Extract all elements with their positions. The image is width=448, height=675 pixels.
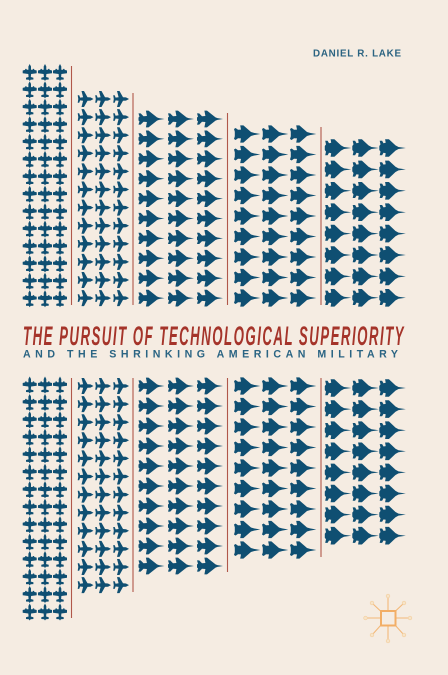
top column 5: stealth fighters	[325, 139, 406, 307]
bottom column dividers	[72, 378, 321, 618]
top column dividers	[72, 66, 321, 305]
bottom column 3: delta-wing jets	[138, 378, 223, 574]
icon: publisher logo	[364, 594, 412, 643]
subtitle: AND THE SHRINKING AMERICAN MILITARY	[23, 348, 398, 360]
bottom column 4: twin-tail fighters	[234, 377, 316, 559]
top column 1: propeller planes	[23, 64, 67, 307]
author name: DANIEL R. LAKE	[313, 48, 401, 59]
top column 2: early jets	[78, 91, 129, 306]
top plane chart	[23, 64, 406, 307]
bottom column 1: propeller planes	[23, 376, 67, 620]
bottom column 5: stealth fighters	[325, 379, 406, 544]
bottom plane chart	[23, 376, 406, 620]
bottom column 2: early jets	[78, 378, 129, 593]
top column 3: delta-wing jets	[138, 111, 223, 306]
top column 4: twin-tail fighters	[234, 125, 316, 307]
